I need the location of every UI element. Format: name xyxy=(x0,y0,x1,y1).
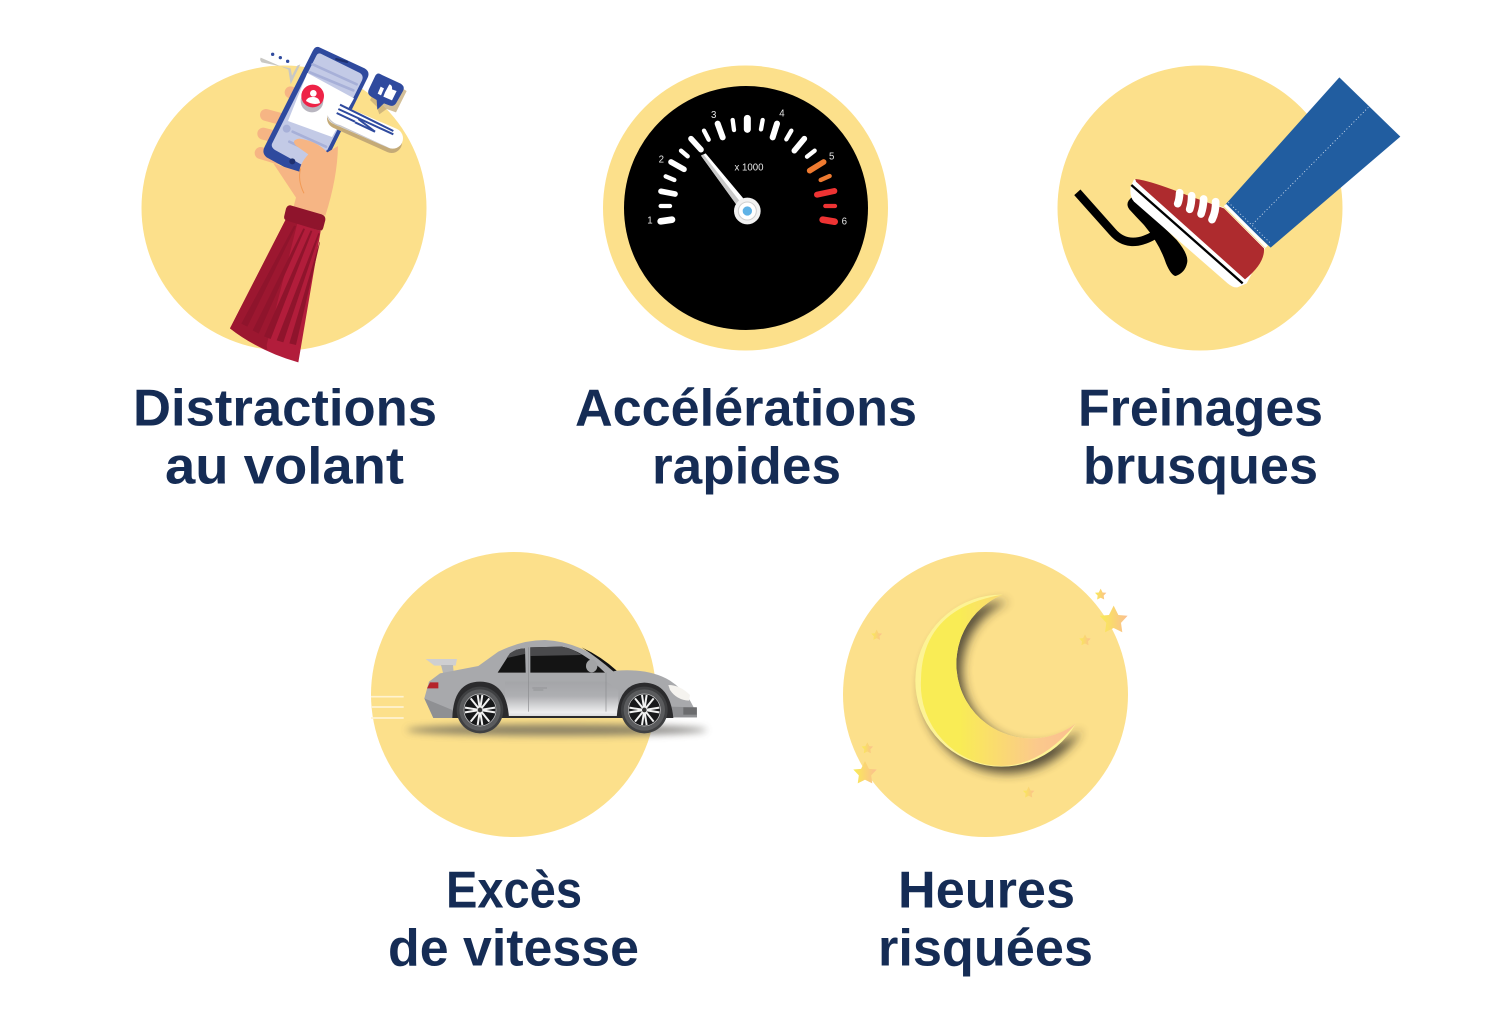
icon: tachometer xyxy=(647,109,847,228)
ticks xyxy=(661,118,835,222)
label xyxy=(388,862,639,978)
circle background xyxy=(843,552,1128,837)
car body xyxy=(424,640,697,718)
door panels xyxy=(505,682,618,718)
panel: heures risquées xyxy=(843,552,1128,978)
label: Freinages xyxy=(1078,380,1323,438)
panel: distractions au volant xyxy=(133,47,437,495)
pedal xyxy=(1077,192,1187,276)
label xyxy=(575,380,917,496)
label: Excès xyxy=(446,862,582,920)
scale numbers: 3 xyxy=(711,110,716,121)
palm and thumb xyxy=(273,139,338,216)
panel: freinages brusques xyxy=(1058,66,1400,496)
label: Accélérations xyxy=(575,380,917,438)
gauge dial xyxy=(624,86,868,330)
spoiler xyxy=(426,659,457,675)
moon highlight xyxy=(915,595,1076,767)
icon: car xyxy=(371,640,707,736)
tail light xyxy=(427,682,438,688)
chat bubble with lines xyxy=(327,105,393,150)
scale numbers xyxy=(647,109,847,228)
circle background xyxy=(142,66,426,350)
speed lines xyxy=(371,697,404,718)
icon: hand holding a phone xyxy=(230,47,407,362)
needle xyxy=(701,153,745,205)
label: Heures xyxy=(898,862,1075,920)
circle background xyxy=(603,66,888,350)
door lines xyxy=(528,647,606,712)
panel: accélérations rapides xyxy=(575,66,917,496)
headlight xyxy=(668,685,690,701)
label xyxy=(878,862,1093,978)
sleeve xyxy=(230,205,325,362)
scale numbers: 4 xyxy=(779,109,785,120)
typing bubble xyxy=(260,53,300,84)
windows xyxy=(498,647,617,673)
moon shadow xyxy=(921,601,1082,773)
panel: excès de vitesse xyxy=(371,552,707,978)
front wheel xyxy=(621,687,668,733)
label xyxy=(1078,380,1323,496)
shoe xyxy=(1130,179,1267,287)
fingers xyxy=(261,92,300,158)
stars xyxy=(853,589,1128,798)
wheel arches xyxy=(452,682,673,718)
circle background xyxy=(371,552,656,837)
icon: moon and stars xyxy=(853,589,1128,798)
needle hub xyxy=(734,198,761,224)
scale numbers: 2 xyxy=(659,154,664,165)
label xyxy=(133,380,437,496)
phone xyxy=(263,47,369,179)
label: brusques xyxy=(1083,438,1318,496)
label: Distractions xyxy=(133,380,437,438)
scale numbers: 5 xyxy=(829,152,834,163)
scale numbers: 1 xyxy=(647,215,653,226)
label: risquées xyxy=(878,920,1093,978)
trouser leg xyxy=(1225,77,1400,248)
ground shadow xyxy=(407,724,707,736)
scale numbers: 6 xyxy=(842,217,847,228)
scale numbers: x 1000 xyxy=(734,163,763,174)
label: de vitesse xyxy=(388,920,639,978)
icon: foot braking xyxy=(1077,77,1400,287)
circle background xyxy=(1058,66,1342,350)
like bubble xyxy=(368,74,407,114)
label: rapides xyxy=(652,438,841,496)
rear wheel xyxy=(457,687,503,733)
label: au volant xyxy=(165,438,404,496)
moon xyxy=(921,595,1076,766)
